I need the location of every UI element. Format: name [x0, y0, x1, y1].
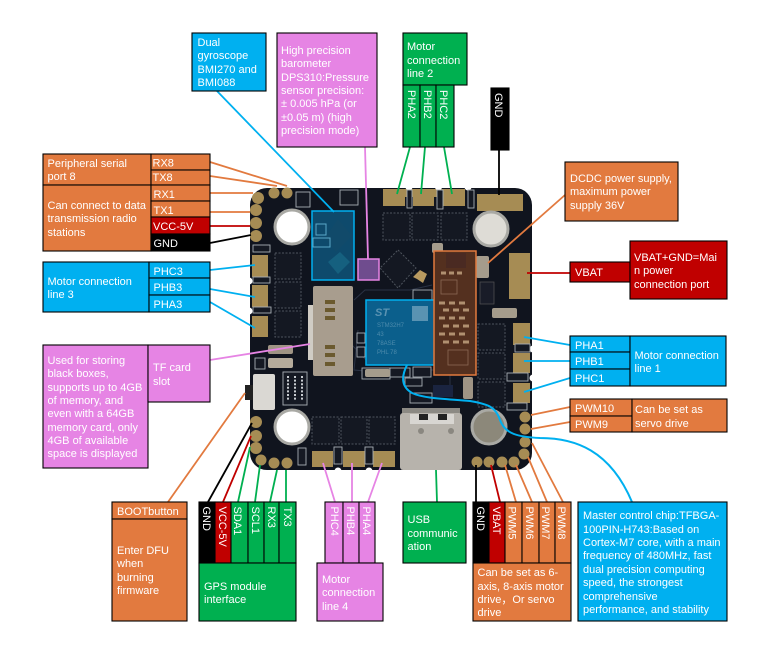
panel: motor connection line 2: PHB2	[421, 90, 433, 119]
panel: motor connection line 1: PHB1	[575, 356, 604, 368]
panel: GPS module interface: SDA1	[231, 506, 243, 535]
panel: USB communication: communic	[408, 528, 458, 540]
panel: serial ports: RX8	[152, 158, 174, 170]
panel: barometer: ±0.05 m) (high	[281, 112, 352, 124]
panel: TF card slot: supports up to 4GB	[48, 382, 142, 394]
panel: master control chip: comprehensive	[583, 591, 658, 603]
panel: TF card slot: slot	[153, 376, 170, 388]
panel: dual gyroscope: Dual	[198, 37, 220, 49]
panel: VBAT main power: connection port	[634, 279, 709, 291]
master control chip highlight: ST	[375, 307, 390, 319]
panel: motor connection line 3: Motor connection	[48, 276, 132, 288]
panel: barometer: ± 0.005 hPa (or	[281, 98, 357, 110]
small connectors	[253, 190, 530, 465]
boot button	[245, 374, 275, 410]
panel: BOOT button: Enter DFU	[117, 545, 169, 557]
panel: motor connection line 3: PHB3	[154, 282, 182, 294]
panel: BOOT button	[112, 502, 187, 621]
panel: servo drive: PWM9	[575, 419, 608, 431]
panel: motor connection line 1: line 1	[634, 363, 661, 375]
panel: GPS module interface	[199, 502, 296, 621]
panel: GPS module interface: SCL1	[249, 506, 261, 534]
panel: USB communication	[403, 502, 466, 563]
panel: motor connection line 1: PHC1	[575, 373, 604, 385]
panel: serial ports: VCC-5V	[153, 221, 194, 233]
panel: top GND label: GND	[492, 93, 504, 118]
panel: GPS module interface: RX3	[265, 506, 277, 528]
panel: master control chip: frequency of 480MHz, fast	[583, 550, 711, 562]
panel: serial ports	[43, 154, 210, 251]
DCDC power supply highlight	[434, 251, 476, 375]
panel: BOOT button: firmware	[117, 585, 159, 597]
black leaders	[208, 150, 499, 502]
panel: master control chip: Master control chip:TFBGA-	[583, 510, 720, 522]
panel: motor connection line 2: Motor	[407, 41, 435, 53]
panel: motor connection line 4	[317, 502, 383, 621]
panel: PWM motor drive: PWM7	[539, 506, 551, 540]
panel: motor connection line 2: PHA2	[405, 90, 417, 119]
USB-C port	[400, 408, 462, 470]
panel: motor connection line 2: PHC2	[437, 90, 449, 119]
capacitors	[268, 243, 517, 399]
panel: GPS module interface: interface	[204, 594, 246, 606]
panel: serial ports: transmission radio	[48, 213, 137, 225]
panel: VBAT main power: VBAT+GND=Mai	[634, 252, 717, 264]
panel: PWM motor drive: drive	[478, 607, 501, 619]
panel: master control chip: Cortex-M7 core, with a main	[583, 537, 721, 549]
panel: PWM motor drive: PWM6	[523, 506, 535, 540]
panel: TF card slot: space is displayed	[48, 448, 137, 460]
board body	[250, 188, 532, 470]
panel: barometer: High precision	[281, 45, 351, 57]
panel: PWM motor drive: GND	[474, 506, 486, 531]
panel: serial ports: port 8	[48, 171, 76, 183]
panel: GPS module interface: TX3	[281, 506, 293, 527]
panel: servo drive: servo drive	[635, 418, 689, 430]
panel: GPS module interface: GND	[200, 506, 212, 531]
panel: PWM motor drive: VBAT	[490, 506, 502, 535]
green leaders	[238, 147, 452, 502]
panel: serial ports: GND	[154, 238, 178, 250]
panel: dual gyroscope: gyroscope	[198, 50, 248, 62]
panel: motor connection line 1: PHA1	[575, 340, 604, 352]
panel: PWM motor drive	[473, 502, 571, 621]
panel: barometer: barometer	[281, 58, 331, 70]
leader lines	[168, 91, 632, 502]
panel: TF card slot: memory card, only	[48, 422, 138, 434]
panel: USB communication: USB	[408, 514, 430, 526]
panel: motor connection line 3: PHC3	[154, 266, 183, 278]
panel: TF card slot: of memory, and	[48, 395, 123, 407]
panel: DCDC power supply: maximum power	[570, 186, 651, 198]
MOSFET chips	[275, 213, 505, 444]
panel: motor connection line 4: line 4	[322, 601, 348, 613]
panel: servo drive: Can be set as	[635, 404, 703, 416]
panel: BOOT button: when	[116, 558, 143, 570]
panel: motor connection line 1: Motor connection	[634, 350, 719, 362]
panel: servo drive	[570, 399, 727, 432]
panel: BOOT button: burning	[117, 572, 154, 584]
panel: USB communication: ation	[408, 541, 431, 553]
panel: motor connection line 3: line 3	[48, 289, 74, 301]
panel: motor connection line 3	[43, 262, 210, 312]
panel: servo drive: PWM10	[575, 403, 614, 415]
panel: master control chip: dual precision computing	[583, 564, 705, 576]
red leaders	[210, 226, 570, 502]
panel: barometer: DPS310:Pressure	[281, 72, 369, 84]
panel: motor connection line 4: PHA4	[360, 506, 372, 535]
traces	[352, 285, 450, 392]
panel: barometer	[277, 33, 377, 147]
panel: serial ports: stations	[48, 227, 86, 239]
gyroscope highlight	[312, 211, 354, 280]
panel: motor connection line 4: PHB4	[344, 506, 356, 535]
panel: VBAT main power	[570, 241, 727, 299]
panel: barometer: sensor precision:	[281, 85, 364, 97]
blue leaders	[210, 91, 632, 502]
edge notches	[246, 184, 536, 474]
panel: serial ports: Can connect to data	[48, 200, 147, 212]
panel: barometer: precision mode)	[281, 125, 359, 137]
panel: motor connection line 4: PHC4	[328, 506, 340, 536]
master control chip highlight	[366, 300, 435, 365]
panel: VBAT main power: VBAT	[575, 267, 603, 279]
panel: PWM motor drive: Can be set as 6-	[478, 567, 559, 579]
panel: TF card slot: Used for storing	[48, 355, 125, 367]
solder pads	[250, 188, 530, 468]
panel: GPS module interface: GPS module	[204, 581, 266, 593]
panel: TF card slot	[43, 345, 210, 468]
panel: master control chip	[578, 502, 727, 621]
TF card slot	[308, 286, 353, 376]
panel: DCDC power supply: supply 36V	[570, 200, 625, 212]
panel: dual gyroscope: BMI270 and	[198, 64, 257, 76]
panel: master control chip: performance, and stability	[583, 604, 709, 616]
panel: motor connection line 2: line 2	[407, 68, 433, 80]
panel: TF card slot: TF card	[153, 362, 191, 374]
panel: DCDC power supply: DCDC power supply,	[570, 173, 672, 185]
panel: dual gyroscope: BMI088	[198, 77, 235, 89]
panel: PWM motor drive: PWM5	[506, 506, 518, 540]
panel: TF card slot: even with a 64GB	[48, 408, 134, 420]
panel: motor connection line 3: PHA3	[154, 299, 182, 311]
panel: VBAT main power: n power	[634, 265, 673, 277]
panel: serial ports: Peripheral serial	[48, 158, 127, 170]
master control chip highlight: 43	[377, 332, 384, 338]
panel: serial ports: TX1	[154, 205, 174, 217]
panel: serial ports: RX1	[154, 189, 175, 201]
mounting holes	[275, 210, 508, 444]
barometer highlight	[358, 259, 379, 280]
panel: DCDC power supply	[565, 162, 678, 221]
panel: dual gyroscope	[192, 33, 266, 91]
pink leaders	[210, 147, 382, 502]
panel: PWM motor drive: drive，Or servo	[478, 594, 555, 606]
panel: master control chip: speed, the strongest	[583, 577, 683, 589]
circuit board	[245, 184, 536, 474]
panel: master control chip: 100PIN-H743:Based on	[583, 524, 699, 536]
panel: PWM motor drive: PWM8	[555, 506, 567, 540]
panel: BOOT button: BOOTbutton	[117, 506, 179, 518]
panel: motor connection line 1	[570, 336, 726, 386]
panel: motor connection line 2	[403, 33, 467, 147]
panel: motor connection line 2: connection	[407, 55, 460, 67]
panel: serial ports: TX8	[152, 172, 173, 184]
panel: motor connection line 4: Motor	[322, 574, 350, 586]
master control chip highlight: STM32H7	[377, 323, 405, 329]
panel: GPS module interface: VCC-5V	[216, 506, 228, 548]
orange leaders	[168, 162, 570, 502]
panel: PWM motor drive: axis, 8-axis motor	[478, 581, 564, 593]
panel: TF card slot: 4GB of available	[48, 435, 128, 447]
panel: top GND label	[491, 88, 509, 150]
panel: motor connection line 4: connection	[322, 587, 375, 599]
master control chip highlight: 78ASE	[377, 341, 396, 347]
master control chip highlight: PHL 78	[377, 350, 397, 356]
panel: TF card slot: black boxes,	[48, 368, 109, 380]
